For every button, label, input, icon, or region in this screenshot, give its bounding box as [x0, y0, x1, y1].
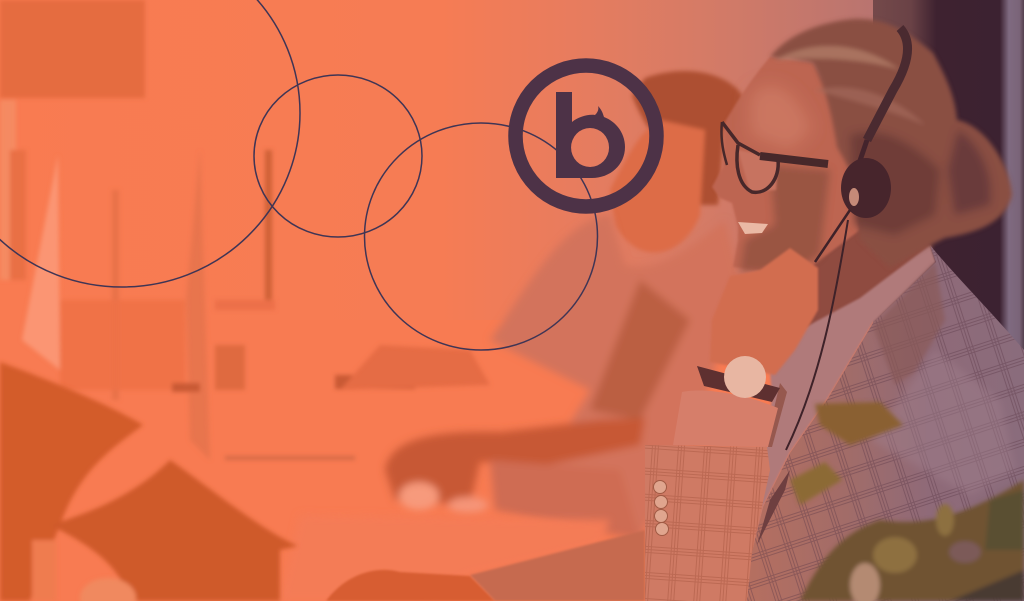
background office: desks and monitors [0, 0, 490, 460]
front agent: sleeve buttons [654, 480, 668, 536]
front agent: shirt body [740, 245, 936, 601]
logo: circled b [516, 66, 656, 206]
background agent: hair [610, 71, 746, 253]
front agent: forearm at desk [470, 530, 645, 601]
front agent: wristwatch [697, 356, 780, 402]
decorative circle: large [0, 0, 300, 287]
front agent: hand on chin [710, 248, 818, 375]
front agent: teeth [738, 222, 768, 234]
front agent: jacket body [745, 245, 1024, 601]
decorative circle: medium [254, 75, 422, 237]
foreground plant right [790, 402, 1024, 601]
decorative circle: right [364, 123, 598, 350]
background agent: shirt and arm [385, 215, 740, 540]
dark window frame at right [873, 0, 1024, 380]
front agent: placket strip [765, 383, 787, 447]
foreground plant left: dark leaves [0, 362, 298, 601]
front agent: neck [780, 200, 932, 360]
front agent: headset band and earpiece [786, 28, 908, 450]
front left hand at desk [326, 570, 495, 601]
desk front [280, 515, 610, 601]
front agent: glasses [721, 122, 828, 192]
front agent: face [712, 57, 860, 275]
front agent: hair and bun [770, 19, 1012, 268]
front agent: shirt cuff [673, 391, 778, 447]
front agent: jacket sleeve [645, 445, 770, 601]
